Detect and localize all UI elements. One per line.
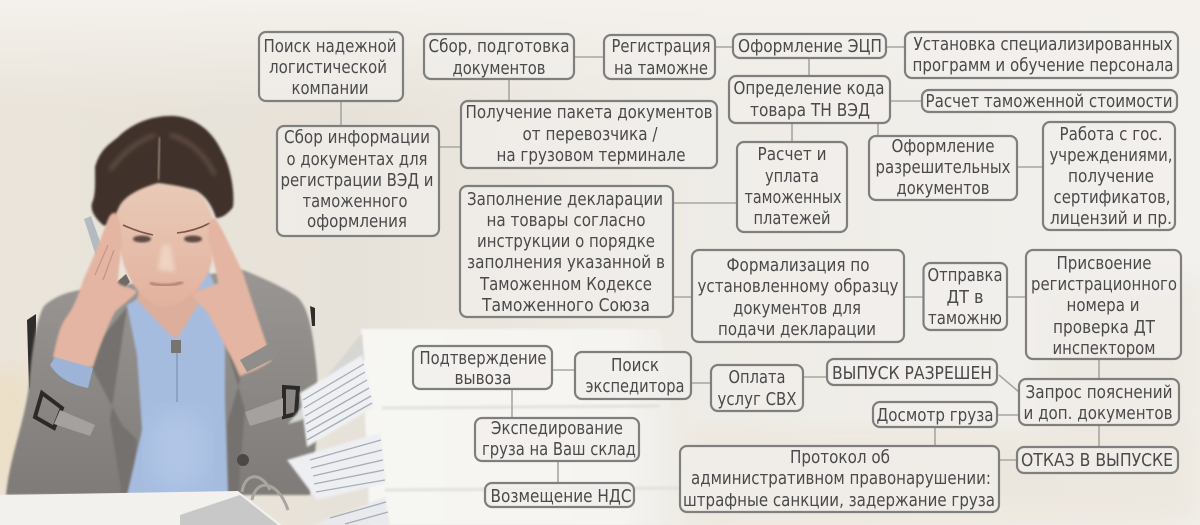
box: Подтверждение вывоза	[413, 346, 552, 389]
right sleeve belt	[284, 387, 298, 417]
box: ВЫПУСК РАЗРЕШЕН: ВЫПУСК РАЗРЕШЕН	[832, 364, 992, 384]
left sleeve belt	[35, 393, 62, 428]
box: Оплата услуг СВХ	[711, 365, 803, 411]
chair	[27, 306, 315, 400]
box: Заполнение декларации: Таможенного Союза	[481, 296, 650, 316]
box: Отправка ДТ в таможню: ДТ в	[946, 288, 984, 308]
connector lines	[341, 47, 1099, 483]
photo: paper stacks	[287, 333, 390, 525]
left hand finger lines	[95, 245, 114, 280]
mouth	[150, 282, 183, 285]
box: Работа с гос. учреждениями: получение	[1068, 167, 1154, 187]
box: Поиск экспедитора: экспедитора	[586, 377, 684, 397]
box: Поиск надежной логистической компании: логистической	[269, 58, 387, 78]
box: Расчет и уплата таможенных платежей	[737, 142, 847, 232]
box: Подтверждение вывоза: Подтверждение	[420, 349, 546, 369]
box: Сбор информации: регистрации ВЭД и	[280, 171, 434, 191]
box: Работа с гос. учреждениями	[1043, 122, 1175, 230]
box: Формализация по образцу	[692, 250, 904, 342]
box: Экспедирование груза: Экспедирование	[491, 419, 623, 439]
box: Работа с гос. учреждениями: учреждениями,	[1050, 146, 1172, 166]
box: Формализация по образцу: подачи декларации	[718, 320, 876, 340]
box: Заполнение декларации: инструкции о порядке	[477, 232, 655, 252]
box: Поиск экспедитора	[575, 352, 691, 399]
box: Заполнение декларации	[460, 186, 673, 317]
desk	[0, 491, 282, 525]
left hand and forearm	[53, 213, 137, 367]
box: Поиск надежной логистической компании: компании	[292, 79, 368, 99]
box: Возмещение НДС: Возмещение НДС	[490, 487, 632, 507]
box: Определение кода товара: Определение кода	[734, 79, 884, 99]
box: Расчет и уплата таможенных платежей: платежей	[754, 209, 830, 229]
photo: paper block behind the diagram	[361, 329, 690, 525]
box: Присвоение регистрационного номера: проверка ДТ	[1053, 318, 1155, 338]
neck	[137, 280, 200, 338]
box: Расчет и уплата таможенных платежей: уплата	[765, 167, 819, 187]
box: Сбор, подготовка документов: документов	[452, 59, 546, 79]
box: Запрос пояснений: Запрос пояснений	[1026, 383, 1172, 403]
box: Расчет и уплата таможенных платежей: Расчет и	[758, 145, 826, 165]
box: ОТКАЗ В ВЫПУСКЕ: ОТКАЗ В ВЫПУСКЕ	[1021, 451, 1173, 471]
box: Отправка ДТ в таможню: Отправка	[928, 266, 1002, 286]
box: Оформление разрешительных документов	[869, 136, 1017, 200]
box: Присвоение регистрационного номера: Присвоение	[1056, 254, 1152, 274]
box: Работа с гос. учреждениями: Работа с гос.	[1060, 125, 1162, 145]
face	[112, 180, 213, 307]
box: Оформление разрешительных документов: документов	[896, 179, 990, 199]
hair	[92, 116, 233, 226]
box: Заполнение декларации: Заполнение декларации	[467, 190, 663, 210]
box: Регистрация на таможне: на таможне	[614, 59, 708, 79]
box: Определение кода товара	[729, 76, 890, 123]
box: ВЫПУСК РАЗРЕШЕН	[827, 359, 997, 385]
eyebrows	[123, 223, 210, 235]
box: Досмотр груза: Досмотр груза	[876, 406, 994, 426]
watch	[240, 342, 279, 372]
box: Поиск надежной логистической компании	[259, 32, 403, 101]
box: Определение кода товара: товара ТН ВЭД	[750, 101, 870, 121]
box: Сбор информации: о документах для	[286, 150, 428, 170]
box: Заполнение декларации: на товары согласно	[486, 211, 646, 231]
box: Оформление разрешительных документов: Оформление	[892, 137, 994, 157]
box: Регистрация на таможне	[604, 35, 715, 79]
box: Поиск надежной логистической компании: Поиск надежной	[264, 37, 396, 57]
box: Экспедирование груза	[475, 418, 639, 461]
box: Работа с гос. учреждениями: сертификатов,	[1054, 188, 1170, 208]
box: Отправка ДТ в таможню: таможню	[928, 309, 1002, 329]
box: Расчет и уплата таможенных платежей: таможенных	[744, 188, 842, 208]
lapels	[92, 307, 245, 495]
box: Оформление разрешительных документов: разрешительных	[876, 158, 1010, 178]
eyes	[133, 236, 151, 242]
box: Присвоение регистрационного номера: регистрационного	[1031, 275, 1177, 295]
box: Получение пакета документов	[461, 101, 717, 168]
box: Получение пакета документов: на грузовом терминале	[496, 146, 686, 166]
jacket	[6, 270, 318, 495]
box: Формализация по образцу: установленному образцу	[698, 277, 898, 297]
box: Заполнение декларации: заполнения указанной в	[467, 253, 665, 273]
shirt	[127, 267, 228, 495]
box: Формализация по образцу: документов для	[733, 299, 861, 319]
necklace	[171, 340, 181, 353]
box: Запрос пояснений	[1019, 379, 1179, 425]
box: Регистрация на таможне: Регистрация	[612, 37, 710, 57]
box: Сбор, подготовка документов	[424, 34, 574, 79]
box: Получение пакета документов: от перевозчика /	[522, 125, 658, 145]
binder rings	[242, 477, 288, 510]
box: Протокол об административном правонарушении: Протокол об	[790, 448, 890, 468]
box: Оплата услуг СВХ: Оплата	[728, 368, 786, 388]
box: Протокол об административном правонарушении: административном правонарушении:	[691, 469, 991, 489]
box: Подтверждение вывоза: вывоза	[454, 369, 512, 389]
box: Оформление ЭЦП: Оформление ЭЦП	[738, 37, 882, 57]
parting	[158, 137, 160, 180]
button	[237, 454, 249, 466]
box: Сбор, подготовка документов: Сбор, подготовка	[428, 37, 570, 57]
box: Присвоение регистрационного номера: инспектором	[1052, 339, 1156, 359]
box: Протокол об административном правонарушении	[680, 446, 999, 512]
box: Сбор информации: оформления	[307, 212, 407, 232]
nose shadow	[158, 245, 175, 272]
photo: stressed woman	[0, 116, 318, 525]
box: Присвоение регистрационного номера	[1026, 250, 1181, 359]
box: Запрос пояснений: и доп. документов	[1024, 404, 1172, 424]
box: Присвоение регистрационного номера: номера и	[1066, 296, 1140, 316]
right hand and forearm	[192, 218, 272, 376]
pen	[84, 216, 103, 256]
box: Протокол об административном правонарушении: штрафные санкции, задержание груза	[683, 491, 995, 511]
hair highlight	[110, 135, 215, 175]
box: Оплата услуг СВХ: услуг СВХ	[718, 390, 797, 410]
box: Сбор информации	[277, 126, 439, 236]
box: Получение пакета документов: Получение пакета документов	[466, 103, 712, 123]
box: Экспедирование груза: груза на Ваш склад	[482, 440, 636, 460]
left cuff	[50, 357, 93, 388]
box: Работа с гос. учреждениями: лицензий и пр.	[1050, 209, 1172, 229]
box: Сбор информации: таможенного	[302, 192, 408, 212]
box: Заполнение декларации: Таможенном Кодексе	[479, 275, 652, 295]
box: Отправка ДТ в таможню	[924, 263, 1007, 330]
box: Сбор информации: Сбор информации	[284, 128, 430, 148]
box: Поиск экспедитора: Поиск	[611, 356, 659, 376]
box: Установка специализированных программ	[905, 32, 1178, 78]
box: Формализация по образцу: Формализация по	[726, 256, 870, 276]
